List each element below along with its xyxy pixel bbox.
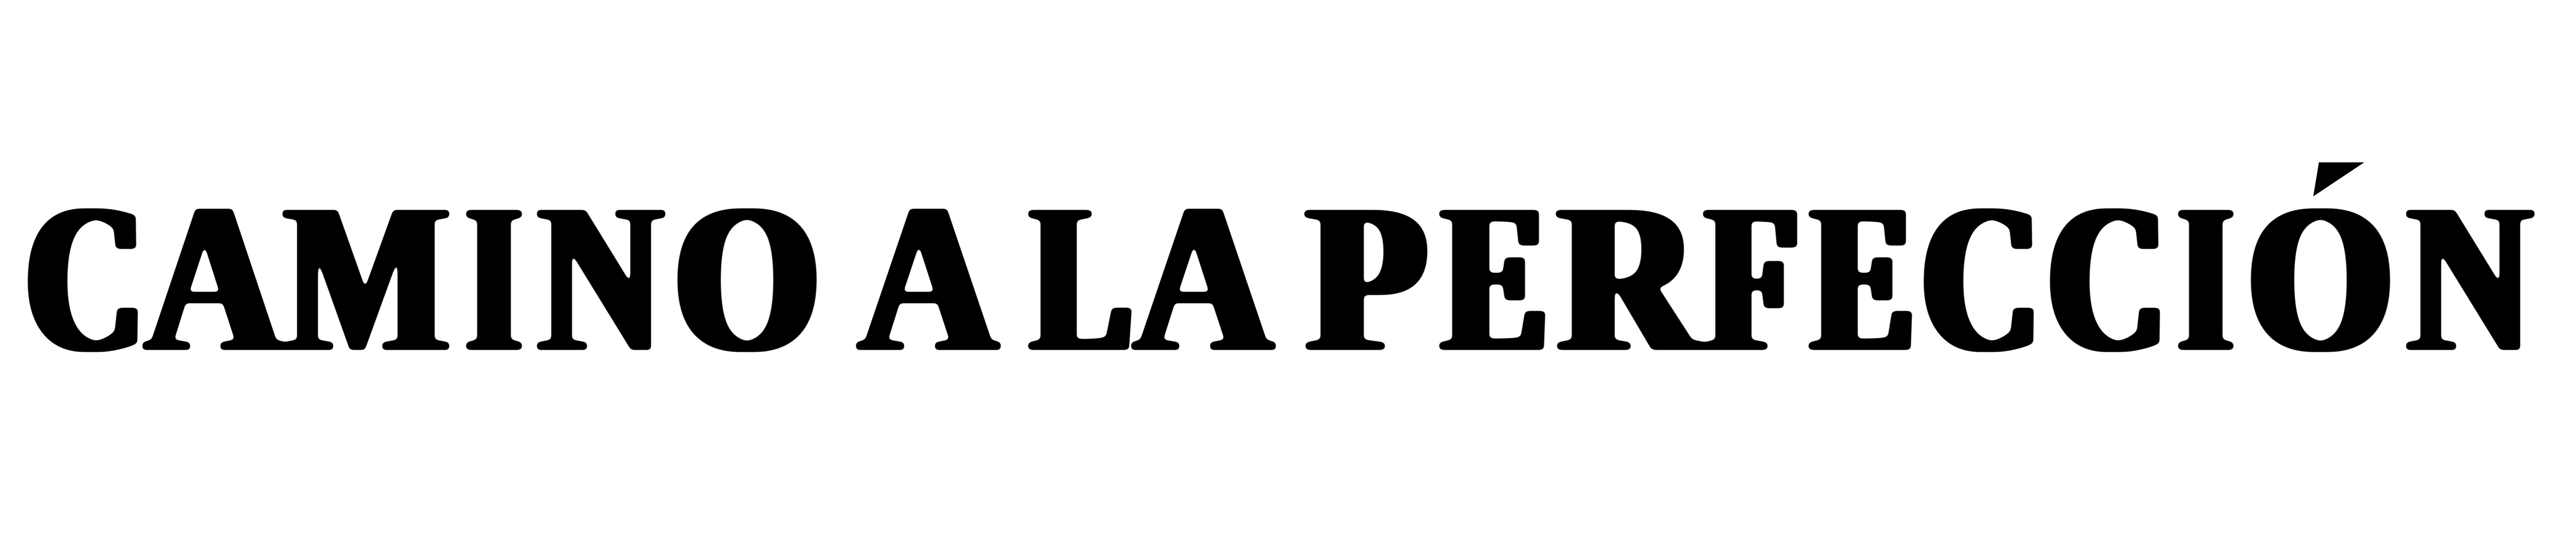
word: CAMINO: N — [539, 160, 663, 396]
word: PERFECCIÓN: C — [1923, 159, 2039, 396]
word: LA — [1032, 160, 1272, 397]
word: CAMINO — [27, 159, 819, 396]
word: PERFECCIÓN: F — [1707, 160, 1798, 397]
word: PERFECCIÓN: E — [1812, 159, 1913, 396]
word: CAMINO: O — [675, 159, 819, 396]
word: CAMINO: A — [146, 159, 282, 396]
word: PERFECCIÓN: C — [2049, 159, 2165, 396]
word: PERFECCIÓN: I — [2180, 160, 2231, 396]
word: CAMINO: M — [284, 159, 449, 396]
word: PERFECCIÓN: E — [1443, 160, 1547, 396]
word: PERFECCIÓN: N — [2408, 160, 2532, 396]
word: CAMINO: C — [27, 159, 143, 396]
word: PERFECCIÓN: R — [1559, 160, 1700, 397]
word: PERFECCIÓN — [1304, 162, 2535, 353]
word: PERFECCIÓN: Ó — [2248, 159, 2393, 396]
title: CAMINO A LA PERFECCIÓN — [27, 162, 2535, 353]
word: LA: L — [1032, 160, 1131, 397]
word: CAMINO: I — [468, 159, 520, 396]
word: LA: A — [1134, 160, 1272, 397]
word: PERFECCIÓN: P — [1308, 159, 1426, 396]
word: A: A — [859, 160, 997, 397]
accent mark on Ó — [2313, 162, 2364, 196]
